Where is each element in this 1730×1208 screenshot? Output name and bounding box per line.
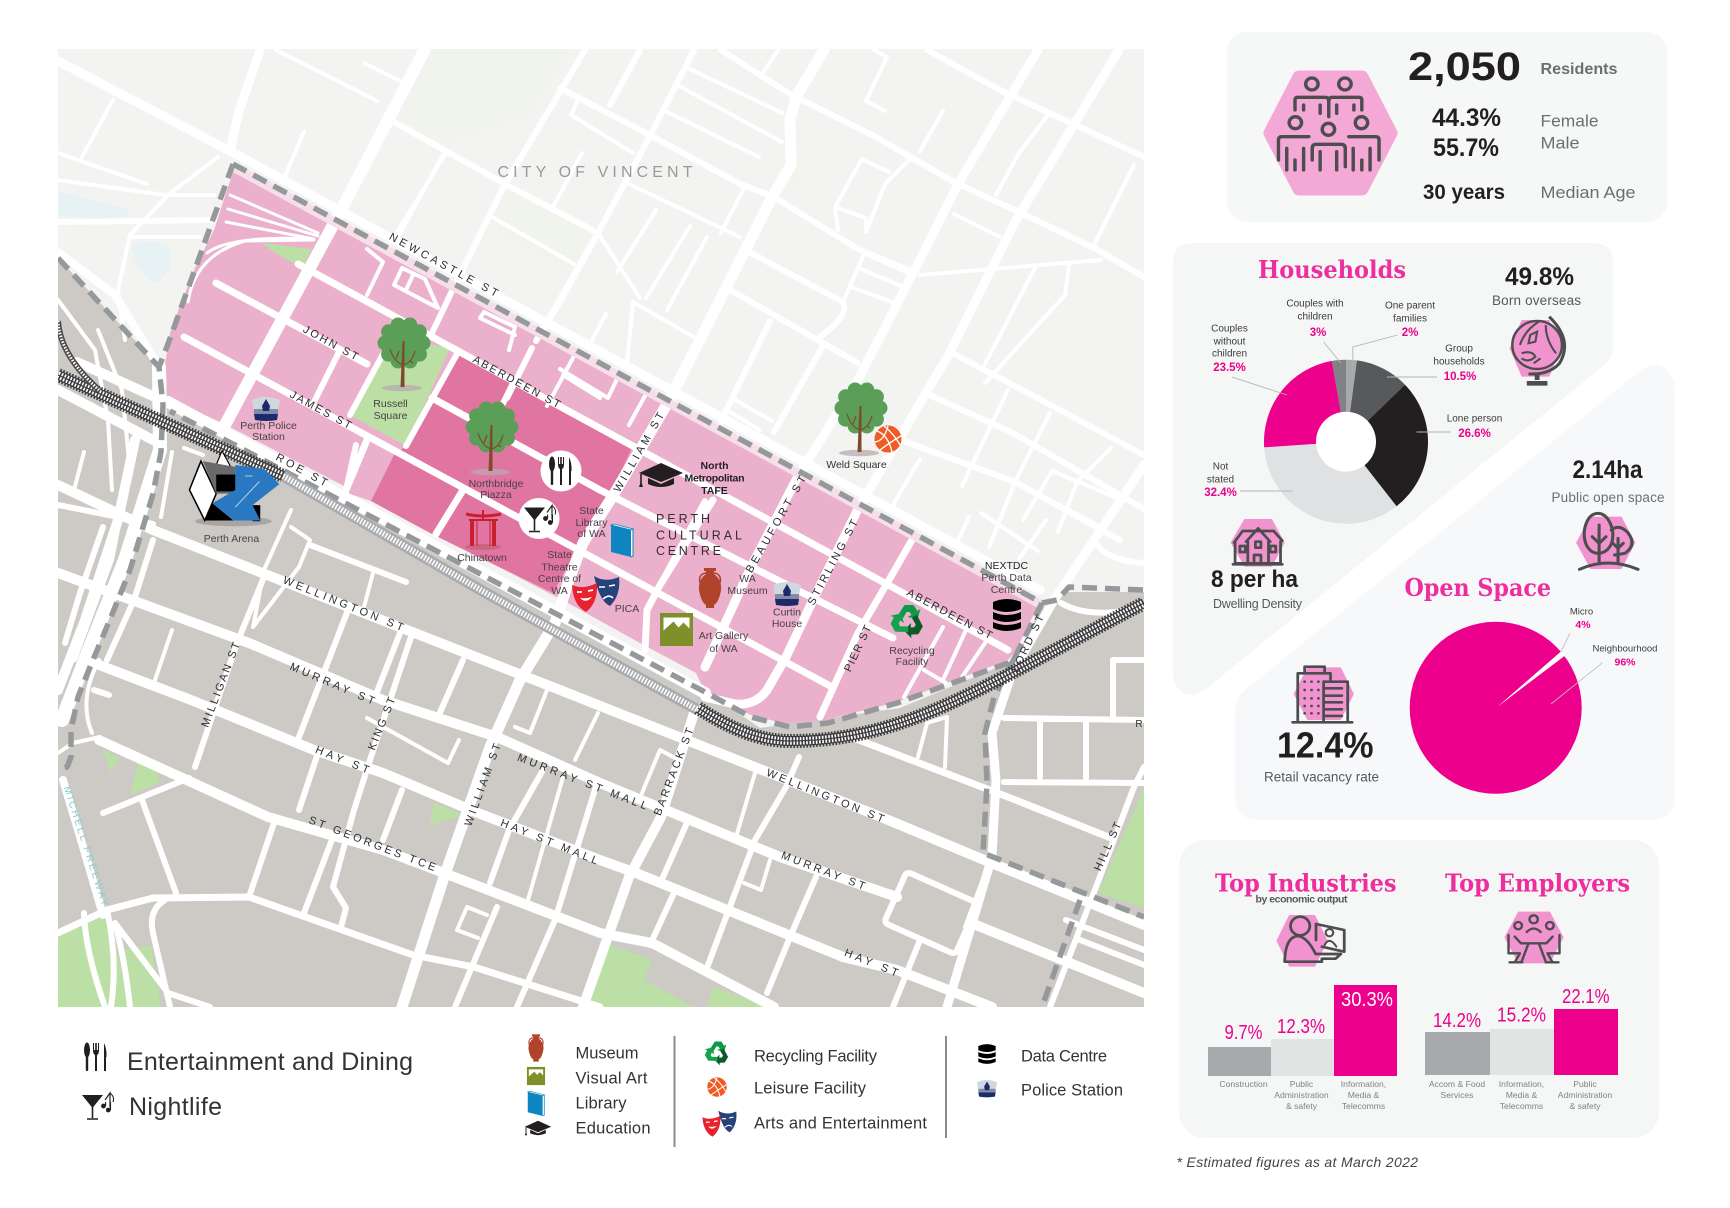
place labels: NEXTDC xyxy=(985,560,1029,572)
street names: HAY ST xyxy=(842,947,900,980)
place labels: Recycling xyxy=(889,645,935,657)
pie label: group households: 10.5% xyxy=(1444,371,1476,383)
bar chart: top employers: 15.2% xyxy=(1497,1004,1546,1026)
legend: facilities xyxy=(702,1041,927,1137)
tree: Russell Square xyxy=(378,318,430,391)
place labels: Russell xyxy=(373,398,408,410)
icon: recycling xyxy=(890,605,923,638)
pie label: couples with children: Couples with xyxy=(1286,298,1344,310)
parks and water xyxy=(58,191,1144,1007)
pie label: couples without children: without xyxy=(1213,336,1246,348)
street names: ST GEORGES TCE xyxy=(307,814,437,874)
heading: Top Employers: Top Employers xyxy=(1445,868,1630,898)
tree: Weld Square xyxy=(834,382,888,456)
icon: amphora xyxy=(699,568,721,608)
bar chart: top employers: 14.2% xyxy=(1433,1010,1481,1032)
donut chart: households xyxy=(1232,335,1451,524)
statistic: retail vacancy rate: Retail vacancy rate xyxy=(1264,770,1379,784)
place labels: Curtin xyxy=(773,606,801,618)
precinct pink blocks xyxy=(165,172,1038,724)
place labels: Metropolitan xyxy=(684,472,744,484)
place labels: Weld Square xyxy=(826,459,887,471)
place labels: Piazza xyxy=(480,489,512,501)
bar chart: top employers: Administration xyxy=(1558,1090,1612,1100)
pie label: group households: households xyxy=(1433,356,1485,368)
pie label: not stated: stated xyxy=(1207,474,1234,486)
pie label: lone person xyxy=(1447,414,1502,440)
icon: fork and knife marker xyxy=(540,450,582,492)
street names: MURRAY ST xyxy=(288,661,377,708)
place labels xyxy=(204,398,1032,668)
bar chart: top industries: 30.3% xyxy=(1341,989,1393,1011)
statistic: dwelling density: Dwelling Density xyxy=(1213,597,1303,611)
place labels: Perth Arena xyxy=(204,533,259,545)
pie label: couples without children xyxy=(1211,324,1248,374)
pie label: couples with children xyxy=(1286,298,1344,339)
pie label: neighbourhood: 96% xyxy=(1614,656,1636,668)
legend: facilities: Leisure Facility xyxy=(754,1080,867,1098)
legend: entertainment and nightlife: Nightlife xyxy=(129,1093,222,1121)
street names: ABERDEEN ST xyxy=(471,354,563,411)
statistic: dwelling density xyxy=(1211,566,1303,611)
legend: culture and education: Visual Art xyxy=(576,1070,648,1088)
statistic: gender split: 44.3% xyxy=(1432,104,1501,132)
pie label: one parent families: 2% xyxy=(1402,327,1418,339)
street names: WELLINGTON ST xyxy=(281,574,405,634)
icon: globe xyxy=(1510,317,1565,383)
label: Perth Cultural Centre xyxy=(656,514,742,555)
panel: residents xyxy=(1227,32,1667,222)
icon: police hat, Curtin House xyxy=(773,582,801,606)
map xyxy=(58,49,1144,1007)
icon: people on pink hexagon xyxy=(1270,77,1391,189)
pie label: not stated: Not xyxy=(1213,462,1229,472)
icon: trees xyxy=(1576,513,1638,569)
place labels: Museum xyxy=(727,585,768,597)
core pink blocks xyxy=(371,354,633,593)
panel: top industries and employers xyxy=(1179,840,1659,1138)
pie label: couples without children: children xyxy=(1212,348,1247,360)
bar chart: top industries: Information, xyxy=(1341,1079,1386,1089)
place labels: Square xyxy=(374,410,408,422)
street names: MURRAY ST MALL xyxy=(516,752,649,813)
pie label: couples without children: Couples xyxy=(1211,324,1248,334)
icon: person at computer xyxy=(1276,915,1344,967)
street names: R xyxy=(1135,719,1143,730)
statistic: public open space: Public open space xyxy=(1552,490,1664,505)
street names: HILL ST xyxy=(1092,820,1124,873)
bar chart: top industries: Construction xyxy=(1219,1079,1268,1089)
bar chart: top industries: 9.7% xyxy=(1224,1022,1263,1044)
street names: MICHELL FREEWAY xyxy=(61,785,110,908)
statistic: residents: Residents xyxy=(1540,61,1618,78)
precinct boundary dashed line xyxy=(58,164,1144,1007)
street names: ROE ST xyxy=(274,451,330,489)
place labels: Facility xyxy=(896,656,929,668)
legend: data centre and police station xyxy=(977,1044,1123,1100)
pie label: lone person: Lone person xyxy=(1447,414,1502,424)
bar chart: top industries: Media & xyxy=(1348,1090,1380,1100)
heading: Open Space: Open Space xyxy=(1404,573,1551,602)
legend: entertainment and nightlife: Entertainment and Dining xyxy=(127,1048,413,1076)
icon: house xyxy=(1231,519,1285,567)
pie chart: open space xyxy=(1410,622,1602,794)
place labels: Station xyxy=(252,431,285,443)
street names: HAY ST MALL xyxy=(499,817,600,867)
place labels: Chinatown xyxy=(457,552,507,564)
street names: PIER ST xyxy=(842,623,874,674)
place labels: Centre of xyxy=(538,573,581,585)
street names: MILLIGAN ST xyxy=(199,641,243,729)
street names: ABERDEEN ST xyxy=(905,587,994,642)
label: Perth Cultural Centre: CENTRE xyxy=(656,544,721,558)
bar chart: top employers xyxy=(1425,986,1618,1111)
icon: graduation cap xyxy=(639,463,683,487)
street names: JOHN ST xyxy=(301,324,360,363)
statistic: dwelling density: 8 per ha xyxy=(1211,566,1299,593)
bar chart: top industries: Public xyxy=(1290,1079,1314,1089)
place labels: of WA xyxy=(577,528,606,540)
pie label: micro: 4% xyxy=(1575,619,1591,631)
place labels: Library xyxy=(575,517,608,529)
statistic: median age: Median Age xyxy=(1540,183,1636,202)
label: Perth Cultural Centre: PERTH xyxy=(656,512,710,526)
legend: data centre and police station: Police Station xyxy=(1021,1082,1123,1100)
statistic: residents: 2,050 xyxy=(1408,45,1521,89)
bar chart: top employers: Accom & Food xyxy=(1429,1079,1485,1089)
icon: art gallery picture xyxy=(660,613,693,646)
footnote: * Estimated figures as at March 2022 xyxy=(1176,1154,1418,1170)
statistic: median age xyxy=(1423,181,1636,204)
Russell Square green and small park xyxy=(262,243,450,446)
icon: building xyxy=(1293,667,1354,722)
bar chart: top employers: Information, xyxy=(1499,1079,1544,1089)
street names: HAY ST xyxy=(313,744,371,777)
bar chart: top employers: 22.1% xyxy=(1562,986,1610,1008)
legend: data centre and police station: Data Centre xyxy=(1021,1048,1107,1066)
pie label: couples without children: 23.5% xyxy=(1213,362,1246,374)
place labels: Perth Data xyxy=(981,572,1032,584)
panel: households xyxy=(1173,243,1613,695)
bar chart: top employers: Telecomms xyxy=(1500,1101,1543,1111)
statistic: residents xyxy=(1408,45,1618,89)
place labels: Centre xyxy=(991,584,1022,596)
icon: Perth Arena building xyxy=(189,451,279,526)
bar chart: top industries: 12.3% xyxy=(1277,1016,1325,1038)
legend: culture and education: Library xyxy=(576,1094,627,1112)
bar chart: top industries: Telecomms xyxy=(1342,1101,1385,1111)
icon: book xyxy=(611,524,633,557)
street names: BEAUFORT ST xyxy=(744,474,809,575)
pie label: group households xyxy=(1433,344,1485,383)
place labels: House xyxy=(772,618,802,630)
statistic: gender split: Female xyxy=(1540,112,1598,130)
pie label: lone person: 26.6% xyxy=(1458,428,1491,440)
pie label: not stated xyxy=(1204,462,1237,499)
place labels: of WA xyxy=(709,643,738,655)
street names: LORD ST xyxy=(1010,613,1047,674)
heading: Top Industries: by economic output xyxy=(1256,894,1348,906)
pie label: neighbourhood xyxy=(1593,644,1657,668)
street names: STIRLING ST xyxy=(806,518,861,607)
place labels: PICA xyxy=(615,603,639,615)
bar chart: top industries xyxy=(1208,985,1397,1111)
bar chart: top industries: Administration xyxy=(1274,1090,1329,1100)
pie label: neighbourhood: Neighbourhood xyxy=(1593,644,1657,654)
pie label: one parent families: families xyxy=(1393,314,1427,324)
bar chart: top employers: & safety xyxy=(1569,1101,1601,1111)
bar chart: top industries: & safety xyxy=(1286,1101,1318,1111)
label: City of Vincent: CITY OF VINCENT xyxy=(498,164,693,181)
bar chart: top employers: Services xyxy=(1441,1090,1473,1100)
street names: WELLINGTON ST xyxy=(764,767,886,825)
statistic: born overseas xyxy=(1492,263,1581,308)
icon: data centre xyxy=(993,599,1021,631)
place labels: Theatre xyxy=(541,562,578,574)
pie label: one parent families: One parent xyxy=(1385,300,1435,312)
place labels: WA xyxy=(551,585,568,597)
city area: grey land south of the boundary xyxy=(58,258,1144,1007)
street names xyxy=(61,231,1143,980)
statistic: median age: 30 years xyxy=(1423,181,1505,204)
statistic: public open space: 2.14ha xyxy=(1572,456,1643,484)
pie label: micro xyxy=(1570,606,1593,631)
pie label: couples with children: children xyxy=(1297,312,1333,322)
street names: MURRAY ST xyxy=(779,850,867,893)
place labels: State xyxy=(547,549,572,561)
bar chart: top employers: Media & xyxy=(1506,1090,1538,1100)
panel: open space xyxy=(1235,365,1675,820)
icon: police hat, Perth Police Station xyxy=(252,397,280,421)
street names: KING ST xyxy=(366,695,398,752)
icon: Chinatown gate xyxy=(465,510,501,550)
place labels: WA xyxy=(739,573,756,585)
icon: nightlife marker xyxy=(518,498,560,539)
heading: Top Industries: Top Industries xyxy=(1215,868,1396,898)
legend: culture and education xyxy=(525,1034,650,1138)
street names: JAMES ST xyxy=(288,389,353,432)
statistic: retail vacancy rate: 12.4% xyxy=(1277,724,1374,766)
place labels: Perth Police xyxy=(240,420,297,432)
statistic: born overseas: 49.8% xyxy=(1505,263,1574,291)
statistic: gender split xyxy=(1432,104,1598,162)
icon: basketball xyxy=(874,426,902,452)
statistic: born overseas: Born overseas xyxy=(1492,293,1581,308)
legend: culture and education: Education xyxy=(576,1120,650,1138)
pie label: one parent families xyxy=(1385,300,1435,339)
place labels: Northbridge xyxy=(469,478,524,490)
place labels: Art Gallery xyxy=(699,630,749,642)
icon: theatre masks xyxy=(572,576,619,612)
legend: entertainment and nightlife xyxy=(82,1042,413,1121)
bar chart: top employers: Public xyxy=(1573,1079,1597,1089)
railway tracks xyxy=(58,321,1144,741)
pie label: group households: Group xyxy=(1445,344,1473,354)
place labels: State xyxy=(579,505,604,517)
legend: facilities: Arts and Entertainment xyxy=(754,1114,927,1132)
pie label: micro: Micro xyxy=(1570,606,1593,618)
street names: WILLIAM ST xyxy=(463,742,504,828)
place labels: North xyxy=(700,460,728,472)
heading: Households: Households xyxy=(1258,255,1406,284)
street names: NEWCASTLE ST xyxy=(387,231,500,300)
icon: meeting table xyxy=(1504,912,1564,963)
statistic: gender split: 55.7% xyxy=(1433,134,1499,162)
street names: BARRACK ST xyxy=(652,726,697,817)
legend: culture and education: Museum xyxy=(576,1044,638,1062)
pie label: not stated: 32.4% xyxy=(1204,487,1237,499)
statistic: public open space xyxy=(1552,456,1664,505)
label: Perth Cultural Centre: CULTURAL xyxy=(656,528,742,542)
legend: facilities: Recycling Facility xyxy=(754,1048,878,1066)
statistic: gender split: Male xyxy=(1540,134,1580,152)
place labels: TAFE xyxy=(701,485,728,497)
pie label: couples with children: 3% xyxy=(1310,327,1326,339)
street names: WILLIAM ST xyxy=(612,410,667,494)
statistic: retail vacancy rate xyxy=(1264,724,1379,784)
road network xyxy=(58,49,1144,1007)
tree: Northbridge Piazza xyxy=(466,402,518,475)
